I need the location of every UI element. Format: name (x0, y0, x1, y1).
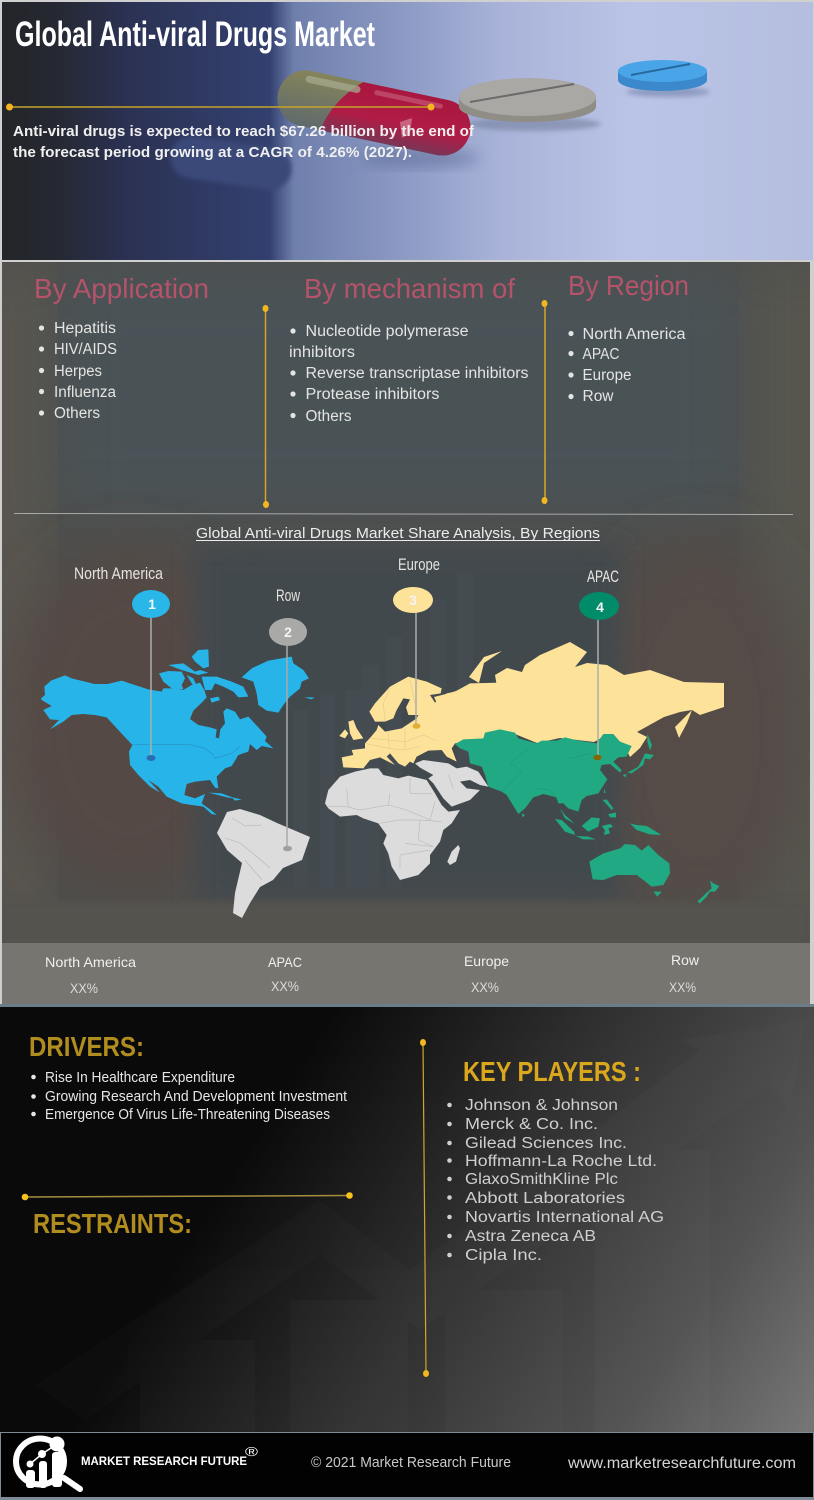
footer (0, 1432, 814, 1500)
list: regions (568, 326, 686, 405)
map section heading: Global Anti-viral Drugs Market Share Analysis, By Regions (196, 525, 600, 542)
copyright: © 2021 Market Research Future (311, 1455, 511, 1471)
panel: regional share table: XX% (271, 979, 299, 994)
list: mechanisms: Others (306, 408, 352, 425)
panel: regional share table: North America (45, 954, 136, 970)
panel: regional share table: Row (671, 952, 700, 968)
list: applications: Hepatitis (54, 320, 116, 337)
icon: capsule (272, 65, 476, 161)
list: applications: HIV/AIDS (54, 341, 117, 358)
list: key players: Merck & Co. Inc. (465, 1116, 598, 1133)
callout: APAC (579, 567, 619, 760)
list: mechanisms: Nucleotide polymerase (306, 323, 468, 340)
list: regions: North America (582, 326, 686, 343)
list: key players: Novartis International AG (465, 1209, 664, 1226)
divider with dots (6, 104, 434, 110)
brand name: ® (245, 1444, 259, 1459)
region: APAC (455, 729, 719, 903)
horizontal divider (22, 1192, 353, 1200)
callout: Europe: Europe (398, 555, 440, 574)
callout: APAC: 4 (596, 599, 604, 615)
panel: regional share table: XX% (669, 980, 696, 995)
list: regions: Europe (582, 367, 632, 384)
website: www.marketresearchfuture.com (567, 1455, 796, 1472)
world map (41, 642, 724, 918)
list: mechanisms (289, 323, 529, 425)
callout: Row: 2 (284, 624, 292, 640)
panel: regional share table: Europe (464, 953, 509, 969)
callout: Europe: 3 (409, 592, 417, 608)
callout: North America (74, 564, 170, 761)
panel: regional share table (0, 943, 814, 1007)
heading: By mechanism of: By mechanism of (304, 273, 515, 304)
heading: key players: KEY PLAYERS : (463, 1056, 641, 1087)
list: regions: APAC (582, 346, 620, 363)
list: drivers: Emergence Of Virus Life-Threatening Diseases (45, 1107, 330, 1123)
panel: drivers, restraints and key players (0, 1007, 814, 1432)
icon: market research future logo (16, 1436, 80, 1489)
list: applications: Influenza (54, 384, 116, 401)
header banner (0, 0, 814, 262)
summary text: the forecast period growing at a CAGR of 4.26% (2027). (13, 144, 412, 161)
list: key players: GlaxoSmithKline Plc (465, 1171, 618, 1188)
summary text: Anti-viral drugs is expected to reach $67.26 billion by the end of (13, 123, 475, 140)
heading: By Application: By Application (34, 273, 209, 304)
panel: regional share table: APAC (268, 954, 302, 970)
callout: Row: Row (276, 586, 301, 605)
vertical divider 3 (420, 1039, 429, 1377)
list: applications (39, 320, 117, 422)
title: Global Anti-viral Drugs Market (15, 15, 375, 54)
heading: By Region: By Region (568, 270, 689, 301)
callout: Row (269, 586, 307, 851)
vertical divider 2 (542, 300, 548, 504)
callout: APAC: APAC (587, 567, 619, 586)
list: key players: Cipla Inc. (465, 1247, 542, 1264)
list: mechanisms: Reverse transcriptase inhibitors (306, 365, 529, 382)
list: key players: Astra Zeneca AB (465, 1228, 596, 1245)
panel: regional share table: XX% (471, 980, 499, 995)
callout: Europe (393, 555, 440, 729)
heading: drivers: DRIVERS: (29, 1031, 144, 1062)
icon: grey tablet (459, 78, 596, 122)
panel: regional share table: XX% (70, 981, 98, 996)
icon: blue tablet (618, 60, 707, 91)
vertical divider 1 (262, 305, 269, 508)
list: mechanisms: Protease inhibitors (306, 386, 440, 403)
list: drivers: Rise In Healthcare Expenditure (45, 1070, 235, 1086)
heading: restraints: RESTRAINTS: (33, 1208, 192, 1239)
region: Europe (339, 642, 724, 768)
list: drivers: Growing Research And Development Investment (45, 1089, 347, 1105)
list: key players: Gilead Sciences Inc. (465, 1135, 627, 1152)
region: Row (217, 760, 488, 918)
list: applications: Herpes (54, 363, 102, 380)
brand name (81, 1444, 259, 1468)
summary text (13, 123, 475, 161)
list: mechanisms: inhibitors (289, 344, 355, 361)
callout: North America: North America (74, 564, 163, 583)
list: key players: Hoffmann-La Roche Ltd. (465, 1153, 657, 1170)
list: key players: Johnson & Johnson (465, 1097, 618, 1114)
region: North America (41, 649, 314, 815)
list: applications: Others (54, 405, 100, 422)
panel: segmentation and map background (0, 260, 814, 1008)
brand name: MARKET RESEARCH FUTURE (81, 1454, 247, 1468)
list: drivers (31, 1070, 347, 1123)
list: key players: Abbott Laboratories (465, 1190, 625, 1207)
callout: North America: 1 (148, 596, 156, 612)
list: regions: Row (582, 388, 614, 405)
list: key players (447, 1097, 664, 1264)
